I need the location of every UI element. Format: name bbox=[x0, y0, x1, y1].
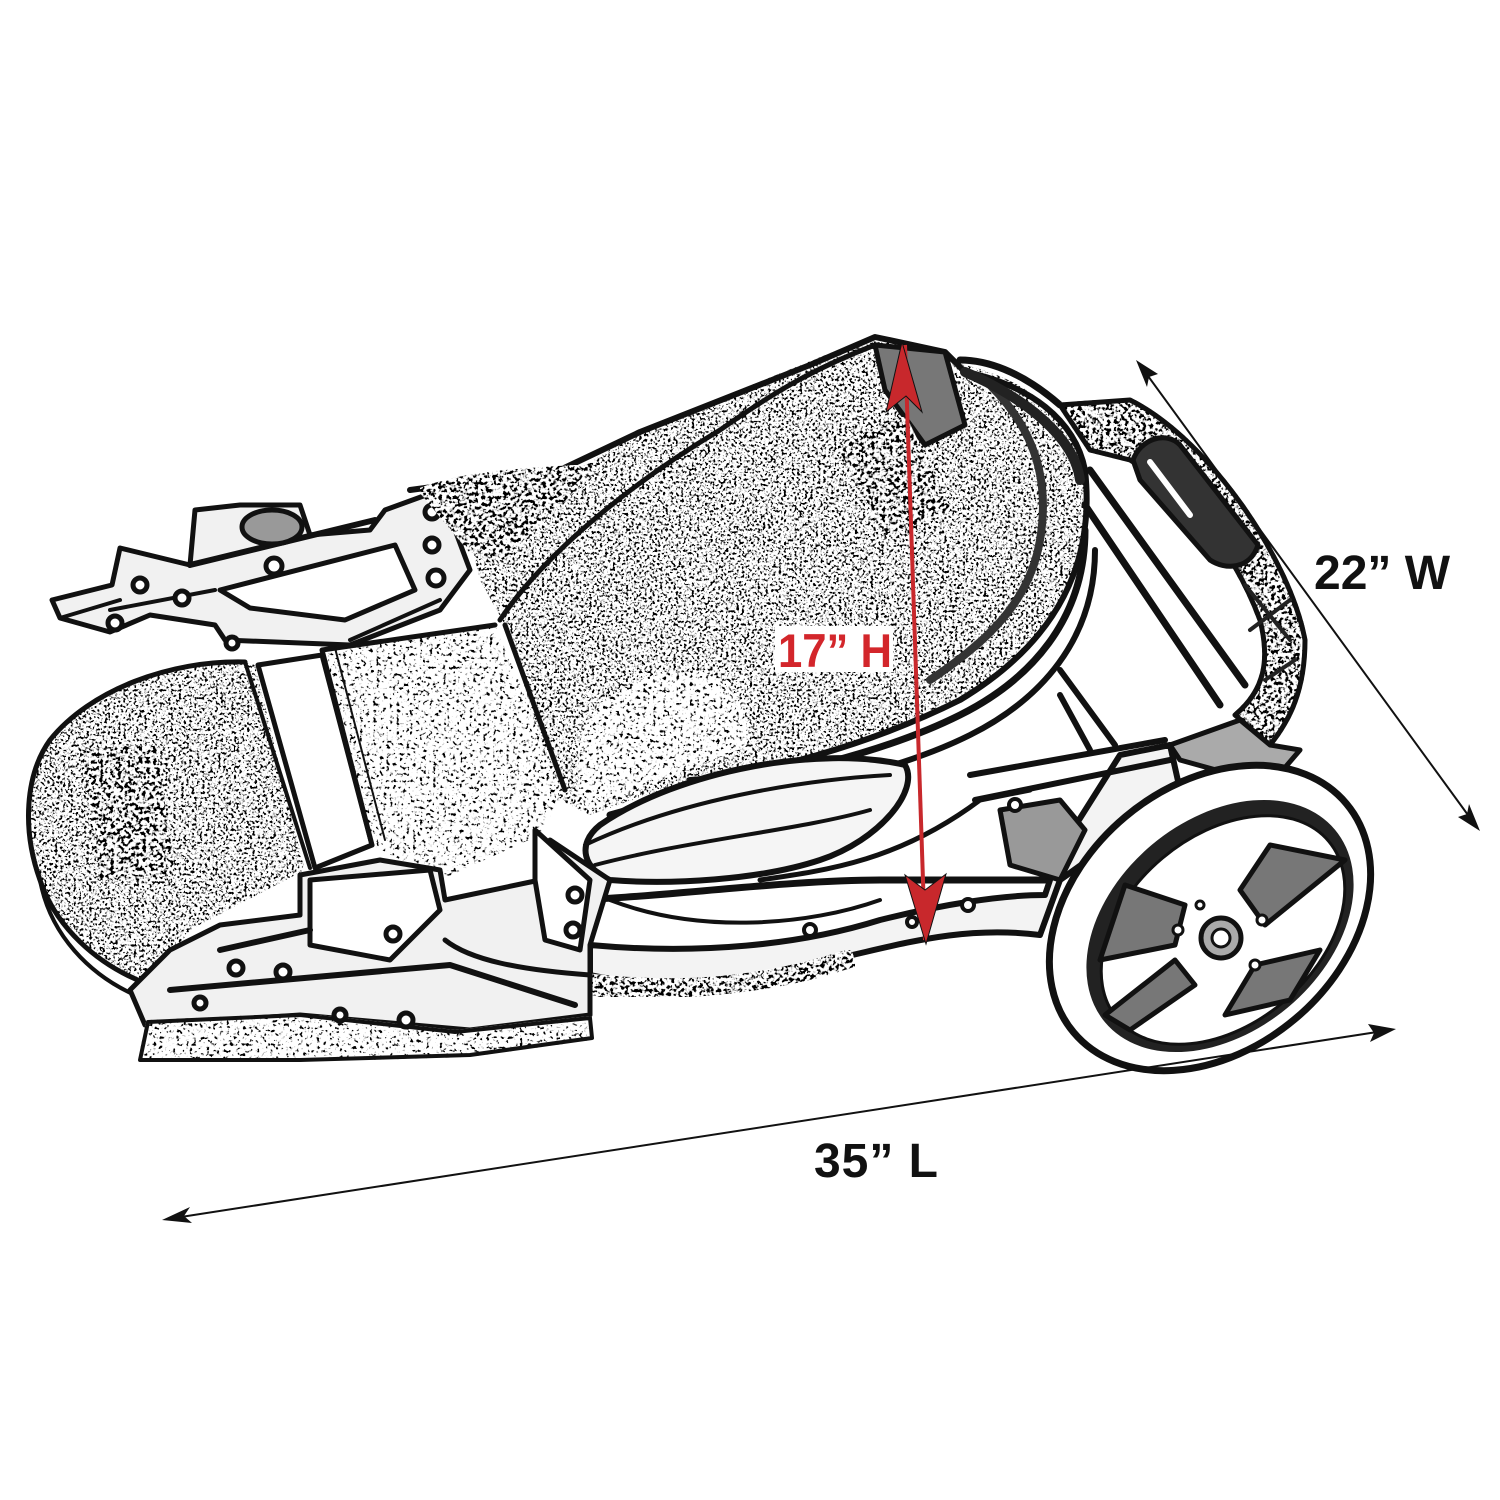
footrest panel bbox=[29, 662, 310, 995]
rear wheel bbox=[989, 702, 1431, 1134]
upper left frame bracket bbox=[52, 490, 470, 649]
stroller line drawing bbox=[29, 337, 1431, 1134]
under frame and rails bbox=[560, 670, 1180, 997]
label: height: 17” H bbox=[778, 624, 892, 677]
label: length: 35” L bbox=[814, 1135, 938, 1188]
canopy fabric bbox=[410, 337, 1087, 815]
length arrowheads bbox=[162, 1024, 1396, 1223]
width arrowheads bbox=[1136, 360, 1480, 831]
dimension arrow: width bbox=[1140, 365, 1476, 826]
dimension arrow: height bbox=[886, 342, 946, 944]
handle bar bbox=[1060, 400, 1305, 785]
label: width: 22” W bbox=[1314, 547, 1451, 600]
lower left frame bracket bbox=[130, 830, 610, 1060]
dimension arrow: length bbox=[168, 1030, 1390, 1219]
white slot and seat panel bbox=[258, 625, 565, 880]
canopy lower edge layers bbox=[585, 530, 1095, 882]
